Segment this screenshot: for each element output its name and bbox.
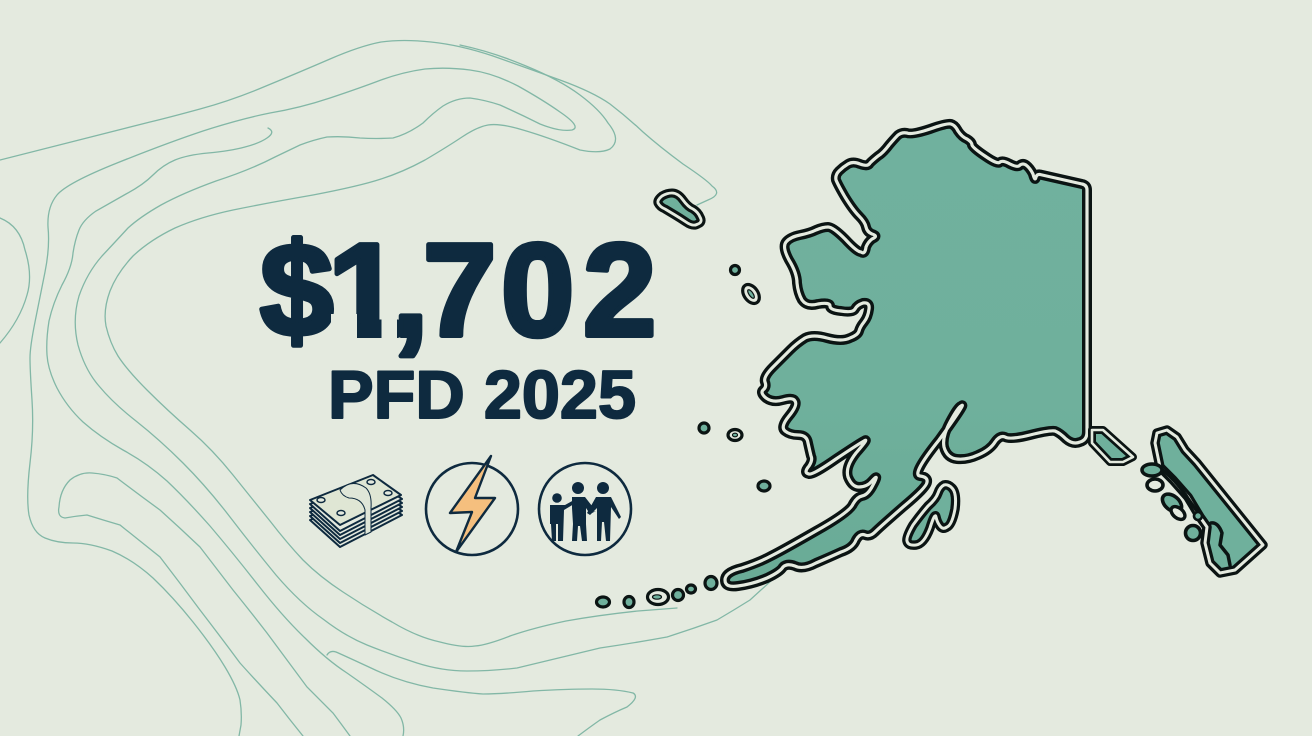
map: Kodiak island bbox=[907, 485, 956, 545]
icon: money stack bbox=[310, 475, 402, 547]
map: southeast panhandle bbox=[1142, 430, 1263, 573]
contour lines background bbox=[0, 40, 772, 736]
map: Alaska mainland bbox=[725, 124, 1087, 586]
amount heading: $1,702 bbox=[260, 216, 656, 364]
icon: family in circle bbox=[539, 463, 631, 555]
map: Bering Sea islands bbox=[699, 266, 770, 491]
map: St. Lawrence island bbox=[658, 193, 701, 225]
map: panhandle strip bbox=[1092, 430, 1133, 462]
map: Aleutian islands bbox=[596, 576, 717, 608]
subtitle: PFD 2025 bbox=[328, 357, 636, 433]
icon: lightning bolt in circle bbox=[426, 456, 518, 555]
